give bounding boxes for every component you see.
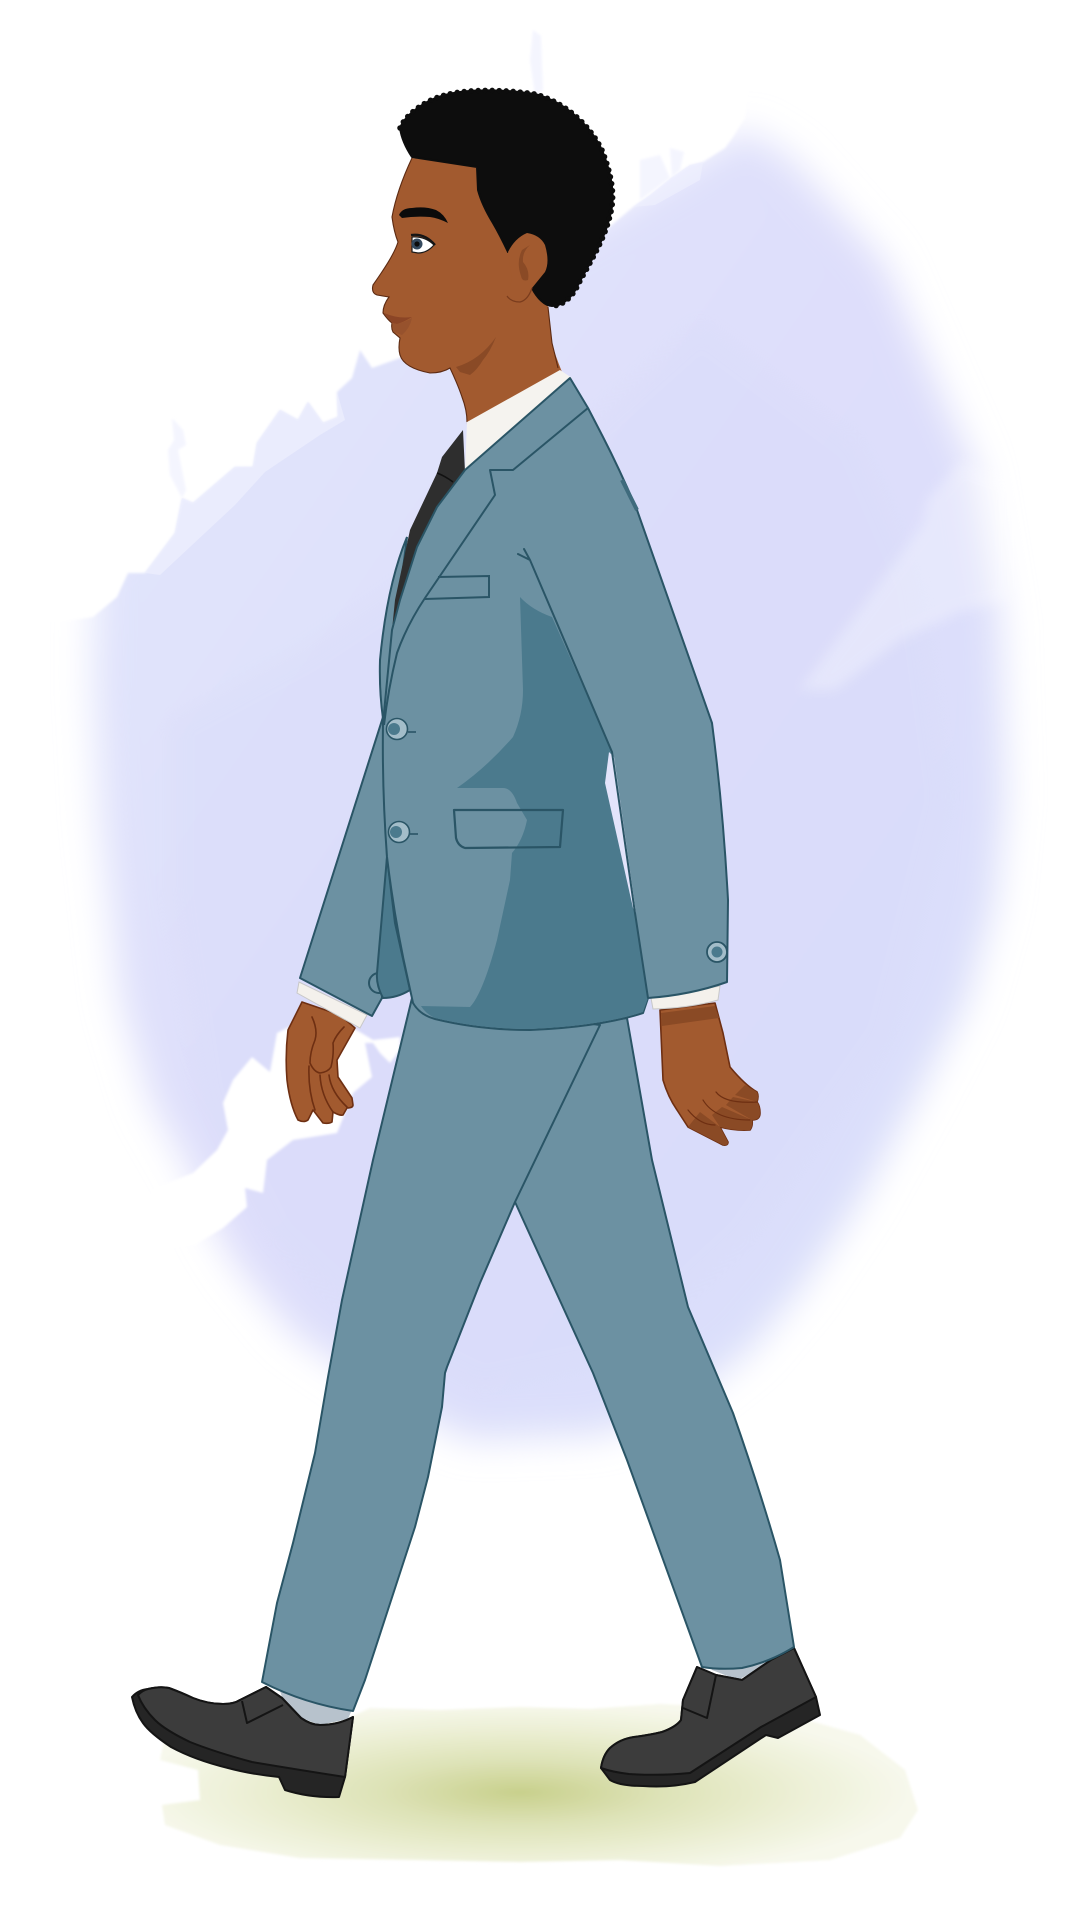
thumb and finger lines: left hand [309, 1017, 347, 1112]
ear [507, 233, 548, 302]
ground shadow: olive watercolor patch [160, 1704, 918, 1866]
far sleeve button [369, 973, 389, 993]
shoe: right [601, 1648, 820, 1786]
shoe: left [132, 1687, 353, 1797]
hand: right [660, 1003, 760, 1145]
jacket lining [377, 857, 410, 998]
sleeve button [707, 942, 727, 962]
face outline [372, 158, 558, 422]
shoe flap: left [242, 1701, 283, 1723]
jacket: lapel [384, 408, 588, 725]
sock: left foot [278, 1685, 356, 1725]
jacket button: lower [388, 822, 418, 842]
finger tips: right hand [688, 1085, 760, 1145]
pale streak on the right [800, 462, 1010, 690]
trouser: front leg [262, 998, 600, 1711]
eye [411, 235, 435, 253]
shirt cuff: left [297, 982, 367, 1028]
hair [400, 90, 613, 306]
neck and face [372, 158, 562, 425]
background: torn white edge at upper left [0, 0, 760, 622]
cuff shadow: right hand [661, 1006, 719, 1026]
jacket button: upper [386, 718, 416, 740]
jacket: far front panel [380, 537, 407, 725]
mouth [384, 313, 412, 335]
necktie [392, 430, 465, 630]
shirt cuff: right [651, 986, 720, 1009]
background: pale torn teeth [145, 162, 703, 575]
shirt collar [465, 370, 572, 472]
background: lavender watercolor wash [93, 130, 1010, 1440]
jacket: chest pocket [425, 576, 489, 599]
background: faint wisps [168, 30, 684, 498]
trouser: back leg [500, 1018, 794, 1669]
darker wash layer [170, 320, 950, 1390]
eyebrow [399, 207, 448, 223]
hand: left [286, 1002, 355, 1123]
jacket: side shadow [421, 597, 648, 1029]
jaw shadow [456, 337, 496, 375]
jacket: body and near sleeve [383, 378, 728, 1030]
hair: curly edge [400, 90, 613, 306]
background: torn white band at lower left [150, 1020, 400, 1250]
jacket: hip pocket [454, 810, 563, 848]
figure: man walking [132, 90, 820, 1797]
shoe flap: right [683, 1675, 716, 1718]
gap between torso and sleeve [605, 752, 636, 913]
far sleeve [300, 717, 387, 1016]
jacket: shoulder mark [622, 480, 637, 510]
sock: right foot [705, 1650, 780, 1680]
jacket: sleeve seam [518, 549, 648, 998]
